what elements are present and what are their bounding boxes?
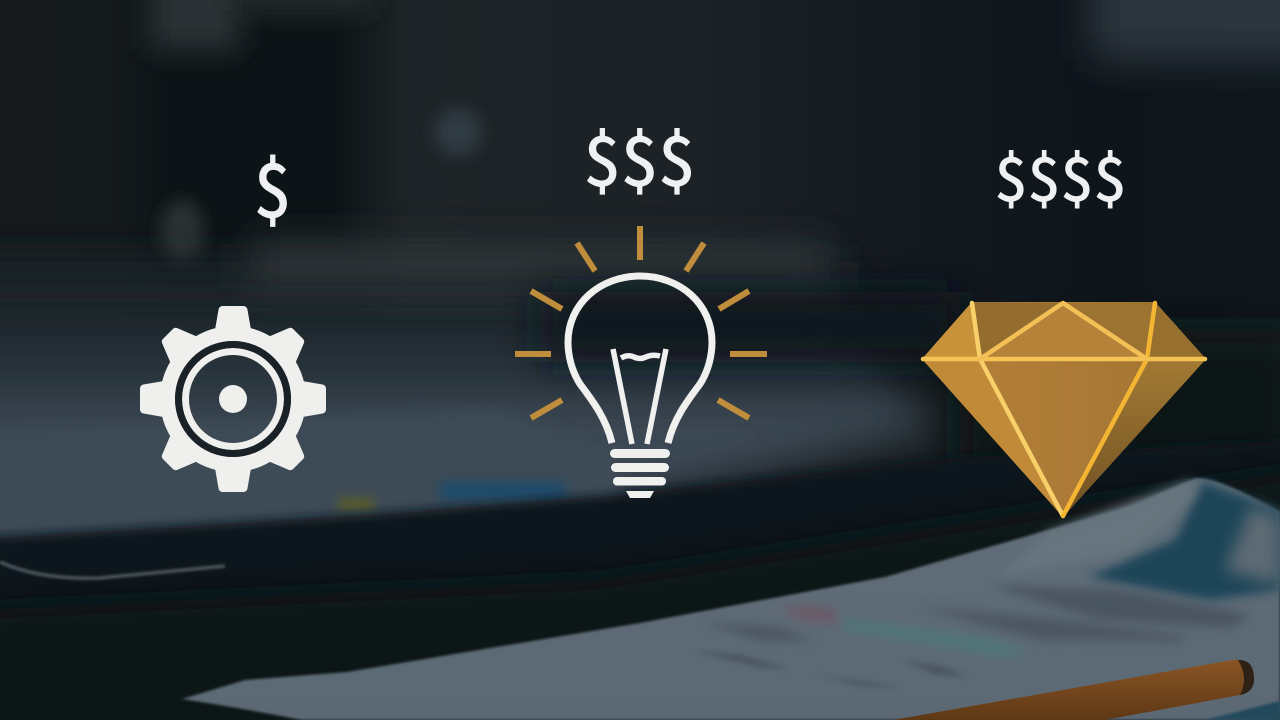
- tier 3: quadruple dollar price label: $$$$: [994, 131, 1127, 219]
- document with pencil in the foreground: [182, 478, 1280, 720]
- bulb rays: [515, 226, 767, 418]
- icon: diamond: [922, 302, 1206, 517]
- paper sheet: [182, 478, 1280, 720]
- bulb screw base: [610, 449, 670, 498]
- bulb glass: [568, 276, 712, 443]
- blurred chart marks on the paper: [693, 585, 1252, 687]
- tier 2: triple dollar price label: $$$: [583, 107, 696, 207]
- icon: gear: [144, 310, 322, 488]
- tier 1: single dollar price label: $: [254, 132, 291, 240]
- gear dark ring: [175, 341, 291, 457]
- icon: light bulb: [515, 226, 767, 498]
- pencil: [893, 660, 1280, 720]
- bulb filament: [613, 349, 666, 444]
